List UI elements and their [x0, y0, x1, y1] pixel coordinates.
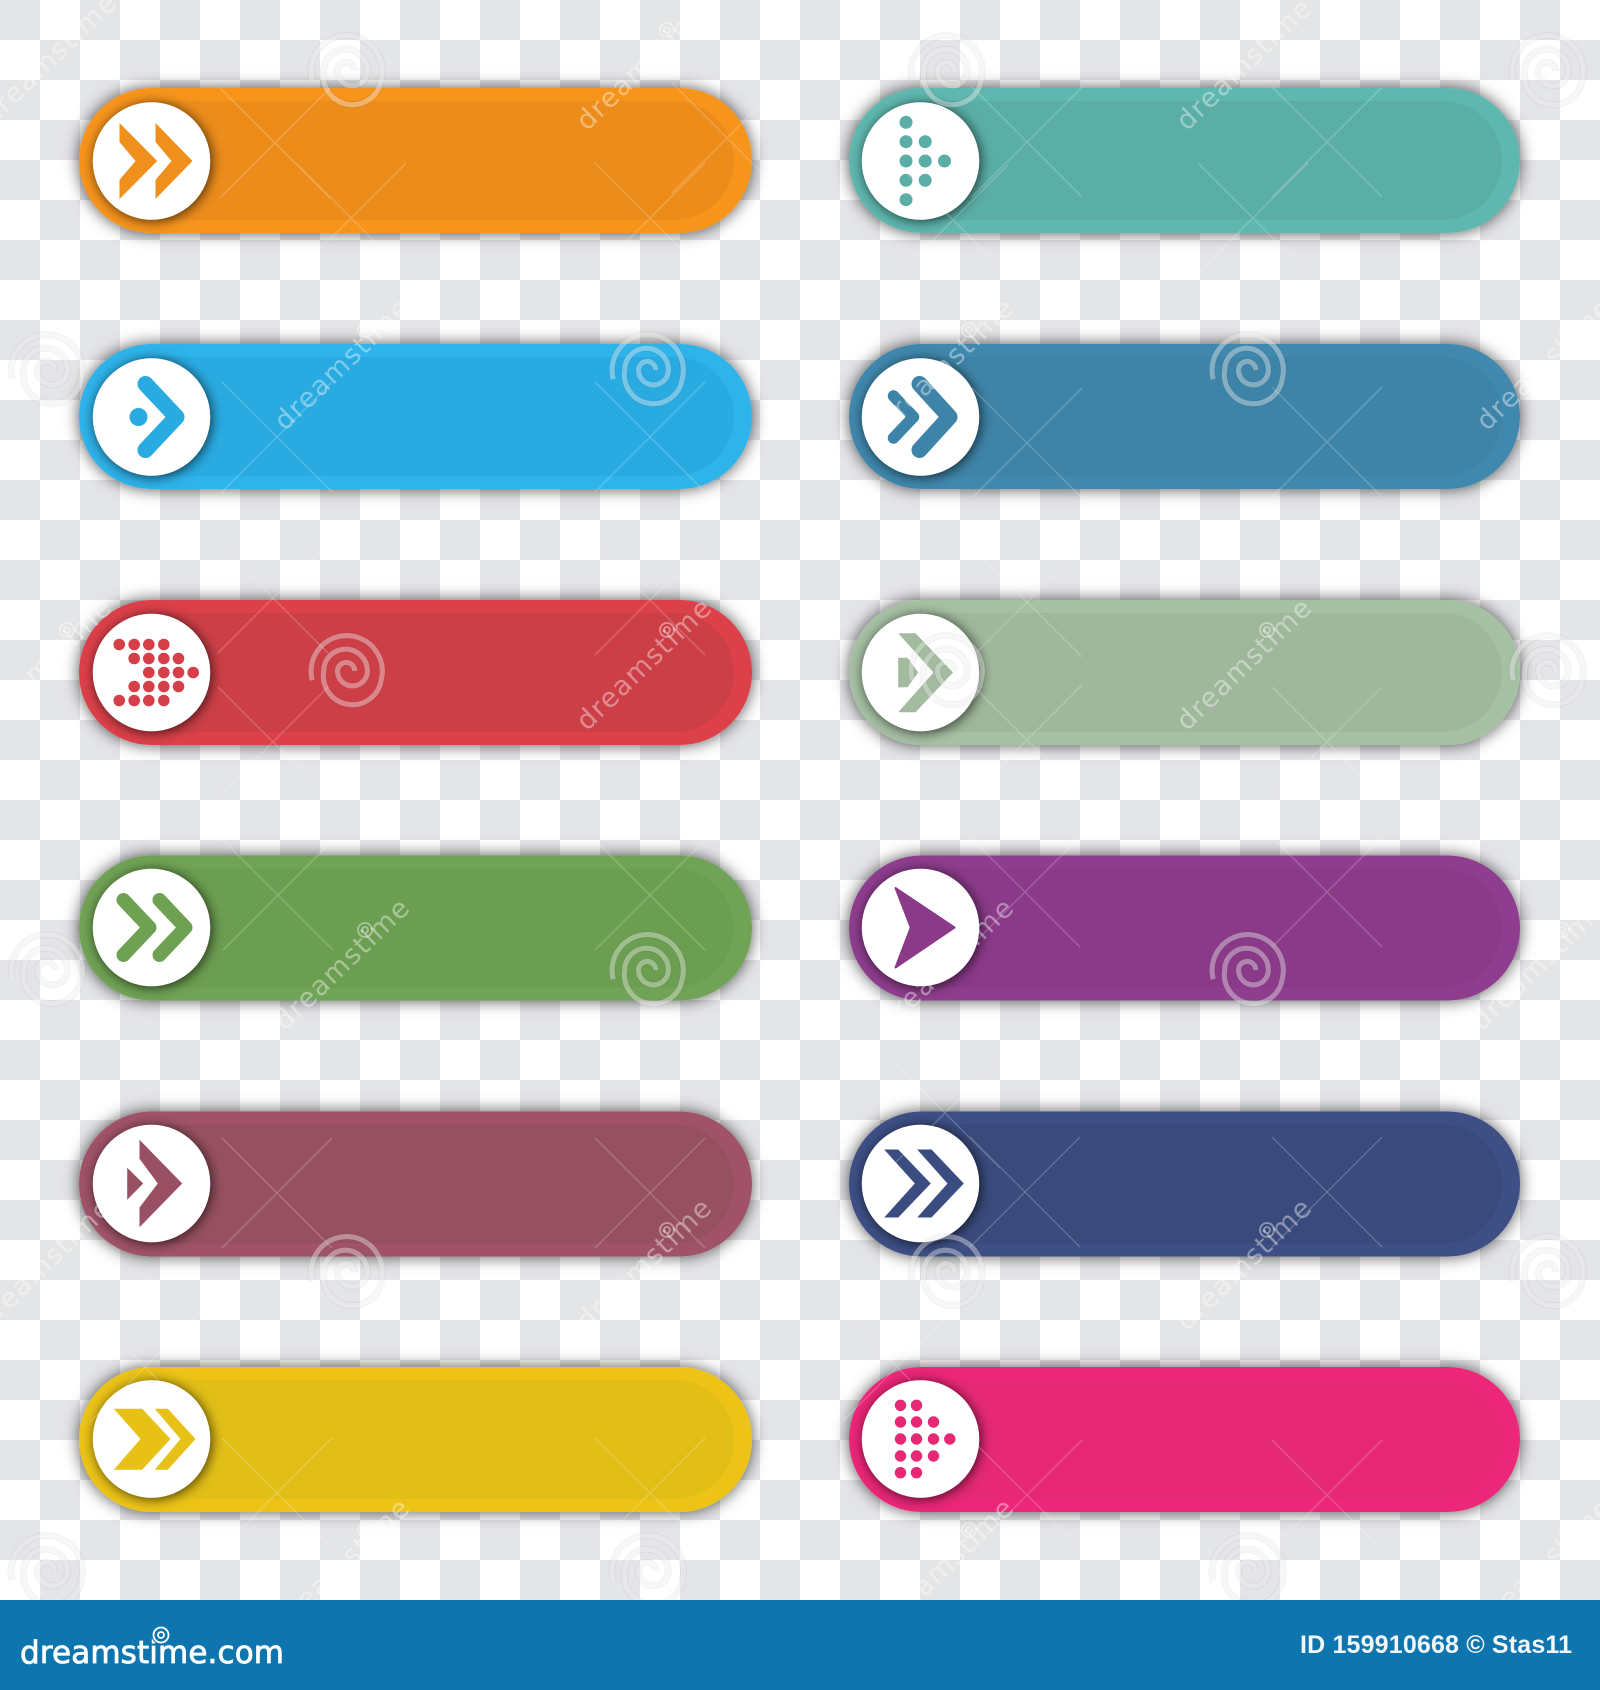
white icon disc [862, 869, 979, 986]
sky blue pill body [79, 344, 752, 489]
watermark text: dreamstime [1170, 593, 1318, 737]
white icon disc [862, 1125, 979, 1242]
button: maroon arrow [79, 1112, 752, 1256]
watermark text: dreamstime [268, 293, 416, 437]
white icon disc [862, 102, 979, 220]
watermark cross lines [90, 83, 1382, 1550]
button: green double chevron [79, 856, 752, 1000]
green pill body [79, 856, 752, 1000]
white icon disc [93, 102, 210, 220]
icon: red dot arrow [113, 639, 199, 706]
watermark text: dreamstime [570, 1193, 718, 1337]
button: steel blue double chevron [849, 344, 1520, 489]
yellow pill body [79, 1367, 752, 1512]
button: yellow double chevron [79, 1367, 752, 1512]
watermark text: dreamstime [872, 1493, 1020, 1637]
icon: pink dot arrow [895, 1400, 956, 1478]
icon: sage chevron and pointed tab [898, 633, 953, 712]
red pill body [79, 600, 752, 745]
sage pill body [849, 600, 1520, 745]
button: purple arrowhead [849, 856, 1520, 1000]
footer brand name: dreamstime.com [20, 1635, 284, 1671]
button: orange double chevron [79, 88, 752, 233]
watermark text: dreamstime [268, 893, 416, 1037]
icon: orange double chevron [120, 123, 192, 199]
orange pill body [79, 88, 752, 233]
icon: chevron with dot [130, 384, 176, 450]
button: teal dotted arrow [849, 88, 1520, 233]
button: navy double chevron [849, 1112, 1520, 1256]
white icon disc [93, 1380, 210, 1498]
icon: maroon chevron and triangle [127, 1140, 182, 1227]
button: sky blue chevron and dot [79, 344, 752, 489]
button: sage chevron [849, 600, 1520, 745]
footer bar [0, 1600, 1600, 1690]
button: red dotted arrow [79, 600, 752, 745]
icon: purple arrowhead [896, 888, 954, 968]
icon: teal dot arrow [900, 116, 951, 206]
watermark text: dreamstime [1170, 1193, 1318, 1337]
button: pink dotted arrow [849, 1367, 1520, 1512]
navy pill body [849, 1112, 1520, 1256]
white icon disc [93, 1125, 210, 1242]
white icon disc [93, 869, 210, 986]
watermark text: dreamstime [872, 293, 1020, 437]
steel blue pill body [849, 344, 1520, 489]
footer image id and credit: ID 159910668 © Stas11 [1300, 1631, 1572, 1659]
purple pill body [849, 856, 1520, 1000]
white icon disc [862, 358, 979, 476]
pink pill body [849, 1367, 1520, 1512]
watermark text: dreamstime [872, 893, 1020, 1037]
teal pill body [849, 88, 1520, 233]
white icon disc [93, 358, 210, 476]
icon: brand spiral [152, 1626, 170, 1644]
white icon disc [862, 614, 979, 731]
white icon disc [93, 614, 210, 731]
white icon disc [862, 1380, 979, 1498]
icon: yellow double chevron [114, 1409, 196, 1470]
icon: green rounded double chevron [124, 900, 186, 955]
icon: navy double chevron [884, 1150, 964, 1218]
maroon pill body [79, 1112, 752, 1256]
watermark text: dreamstime [570, 593, 718, 737]
watermark text: dreamstime [268, 1493, 416, 1637]
icon: small and large rounded chevrons [894, 384, 950, 450]
